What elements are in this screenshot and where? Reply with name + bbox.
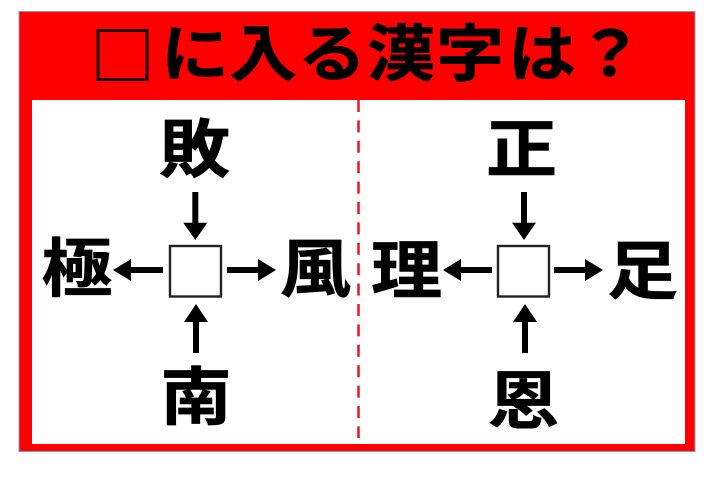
blank box bbox=[498, 246, 549, 296]
arrow up bbox=[513, 304, 537, 353]
title blank square bbox=[98, 30, 147, 80]
white puzzle panel bbox=[32, 100, 685, 444]
title text: 字 bbox=[436, 20, 504, 89]
title text: ？ bbox=[576, 20, 644, 89]
arrow left bbox=[113, 259, 163, 281]
arrow down bbox=[512, 192, 536, 240]
arrow left bbox=[443, 259, 492, 281]
blank box bbox=[170, 246, 221, 296]
title text: る bbox=[298, 20, 366, 89]
left puzzle bbox=[41, 115, 351, 434]
arrow right bbox=[227, 259, 276, 281]
title text: は bbox=[508, 20, 576, 89]
arrow up bbox=[184, 304, 208, 353]
title text bbox=[161, 20, 644, 89]
arrow right bbox=[554, 259, 603, 281]
bottom kanji: 恩 bbox=[488, 367, 559, 438]
right kanji: 風 bbox=[280, 235, 351, 306]
center dashed divider bbox=[357, 100, 360, 438]
right puzzle bbox=[371, 115, 678, 438]
left kanji: 極 bbox=[41, 234, 113, 305]
top kanji: 敗 bbox=[159, 115, 230, 186]
title text: 漢 bbox=[367, 20, 435, 89]
title bbox=[98, 20, 644, 89]
title text: に bbox=[161, 20, 229, 89]
title text: 入 bbox=[229, 20, 297, 89]
bottom kanji: 南 bbox=[160, 363, 232, 434]
left kanji: 理 bbox=[371, 236, 442, 307]
top kanji: 正 bbox=[486, 115, 557, 186]
right kanji: 足 bbox=[607, 237, 678, 308]
arrow down bbox=[183, 192, 207, 240]
